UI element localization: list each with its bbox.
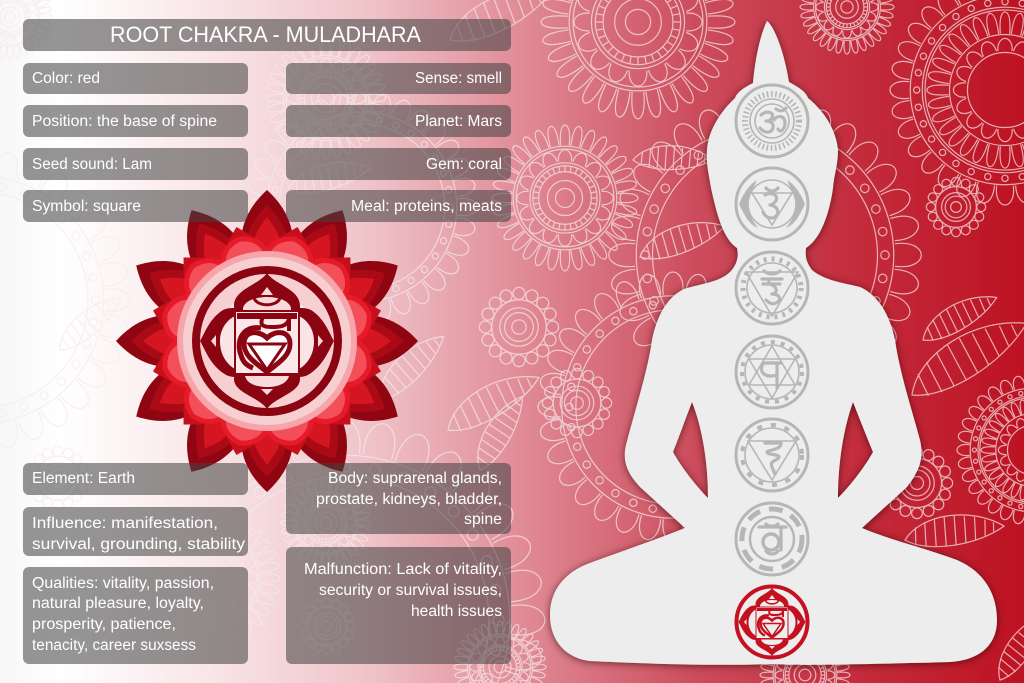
root chakra yantra	[196, 270, 338, 412]
title bar	[23, 19, 511, 51]
panel: malfunction: Malfunction: Lack of vitality,	[304, 561, 502, 578]
panel: body: Body: suprarenal glands,	[328, 470, 502, 487]
panel: color: Color: red	[32, 70, 100, 87]
panel: influence: Influence: manifestation,	[32, 515, 218, 532]
panel: seed sound	[23, 148, 248, 180]
panel: qualities: tenacity, career suxsess	[32, 637, 196, 654]
icon: heart chakra	[736, 336, 808, 408]
panel: planet	[286, 105, 511, 137]
pale centre disc	[177, 251, 357, 431]
panel: influence	[23, 507, 248, 556]
panel: symbol	[23, 190, 248, 222]
inner petals	[149, 223, 385, 459]
panel: qualities: Qualities: vitality, passion,	[32, 575, 214, 592]
meditating figure silhouette	[550, 21, 997, 665]
icon: root chakra highlighted	[736, 586, 808, 658]
panel: influence: survival, grounding, stability	[32, 536, 245, 553]
panel: malfunction: health issues	[411, 603, 502, 620]
panel: sense: Sense: smell	[415, 70, 502, 87]
outer petals	[116, 190, 418, 492]
icon: third eye chakra	[736, 168, 808, 240]
panel: body	[286, 463, 511, 534]
panel: element: Element: Earth	[32, 470, 135, 487]
icon: crown chakra	[736, 85, 808, 157]
panel: gem	[286, 148, 511, 180]
panel: symbol: Symbol: square	[32, 198, 141, 215]
lotus chakra emblem	[116, 190, 418, 492]
panel: body: spine	[464, 511, 502, 528]
panel: seed sound: Seed sound: Lam	[32, 156, 152, 173]
panel: sense	[286, 63, 511, 94]
panel: malfunction: security or survival issues,	[319, 582, 502, 599]
panel: gem: Gem: coral	[426, 156, 502, 173]
panel: position	[23, 105, 248, 137]
panel: meal	[286, 190, 511, 222]
panel: malfunction	[286, 547, 511, 664]
title bar: ROOT CHAKRA - MULADHARA	[110, 22, 421, 47]
panel: element	[23, 463, 248, 495]
panel: qualities: prosperity, patience,	[32, 616, 176, 633]
panel: meal: Meal: proteins, meats	[351, 198, 502, 215]
panel: body: prostate, kidneys, bladder,	[316, 491, 502, 508]
panel: color	[23, 63, 248, 94]
panel: position: Position: the base of spine	[32, 113, 217, 130]
panel: qualities: natural pleasure, loyalty,	[32, 595, 204, 612]
panel: qualities	[23, 567, 248, 664]
icon: throat chakra	[736, 252, 808, 324]
panel: planet: Planet: Mars	[415, 113, 502, 130]
icon: solar plexus chakra	[736, 419, 808, 491]
icon: sacral chakra	[736, 503, 808, 575]
